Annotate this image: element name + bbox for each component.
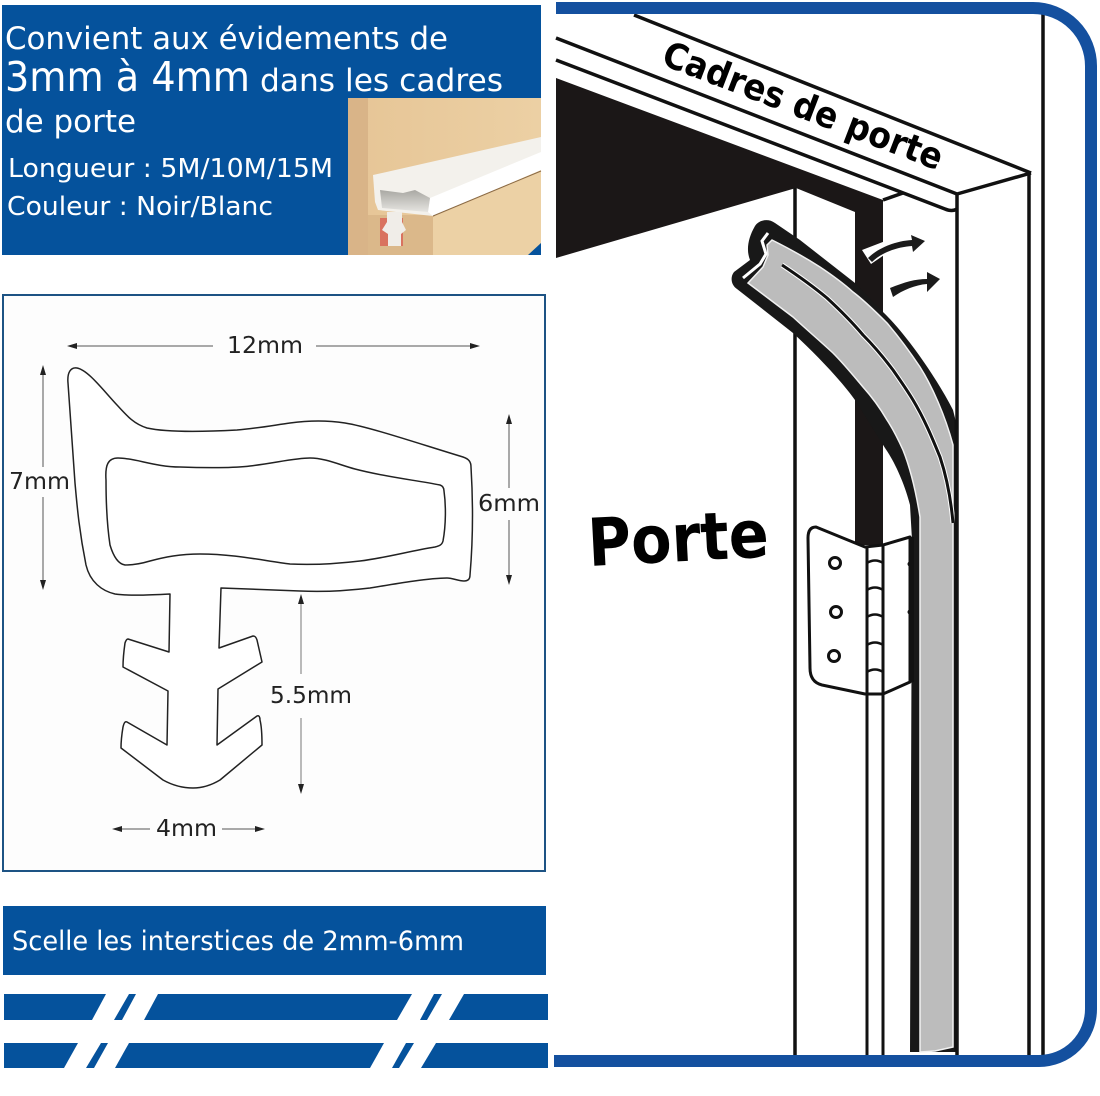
label: Cadres de porte: Cadres de porte [657, 34, 949, 179]
outer blue rounded border [554, 8, 1091, 1061]
dimension: 4mm: 4mm [156, 816, 217, 842]
dimension: 12mm: 12mm [227, 333, 303, 359]
heading: recess size: 3mm à 4mm [5, 53, 250, 101]
dimension: 5.5mm: 5.5mm [270, 683, 352, 709]
dimension: 4mm [112, 816, 265, 842]
text: length and colour: Couleur : Noir/Blanc [7, 192, 273, 222]
seal strip [732, 220, 958, 1052]
text: length and colour: Longueur : 5M/10M/15M [8, 154, 333, 184]
illustration: door frame with seal [554, 8, 1091, 1061]
icon: hinge [808, 527, 912, 694]
dimension: 7mm [9, 365, 70, 590]
arrow: air flow lower [890, 272, 940, 297]
heading: recess size: Convient aux évidements de [5, 21, 448, 57]
dimension: 5.5mm [270, 594, 352, 794]
banner: gap sealing range: Scelle les interstices de 2mm-6mm [12, 926, 464, 957]
banner: gap sealing range [3, 906, 546, 975]
arrow: air flow upper [862, 235, 925, 264]
text: length and colour [7, 154, 333, 222]
heading: recess size [5, 21, 503, 140]
panel: profile dimensions [3, 295, 545, 871]
label: Porte: Porte [586, 496, 771, 582]
heading: recess size: dans les cadres [260, 63, 503, 99]
diagram: seal cross-section [68, 368, 472, 788]
dimension: 6mm: 6mm [478, 491, 540, 517]
dimension: 7mm: 7mm [9, 469, 70, 495]
dimension: 6mm [478, 414, 540, 585]
decoration: slanted blue stripes [4, 994, 548, 1068]
heading: recess size: de porte [5, 104, 136, 140]
door frame lintel and opening [556, 14, 1043, 1055]
lines: hinge edge of door [867, 690, 883, 1055]
photo: seal fitted in wooden frame [348, 98, 541, 255]
dimension: 12mm [67, 333, 480, 359]
panel: header specifications [2, 5, 541, 255]
